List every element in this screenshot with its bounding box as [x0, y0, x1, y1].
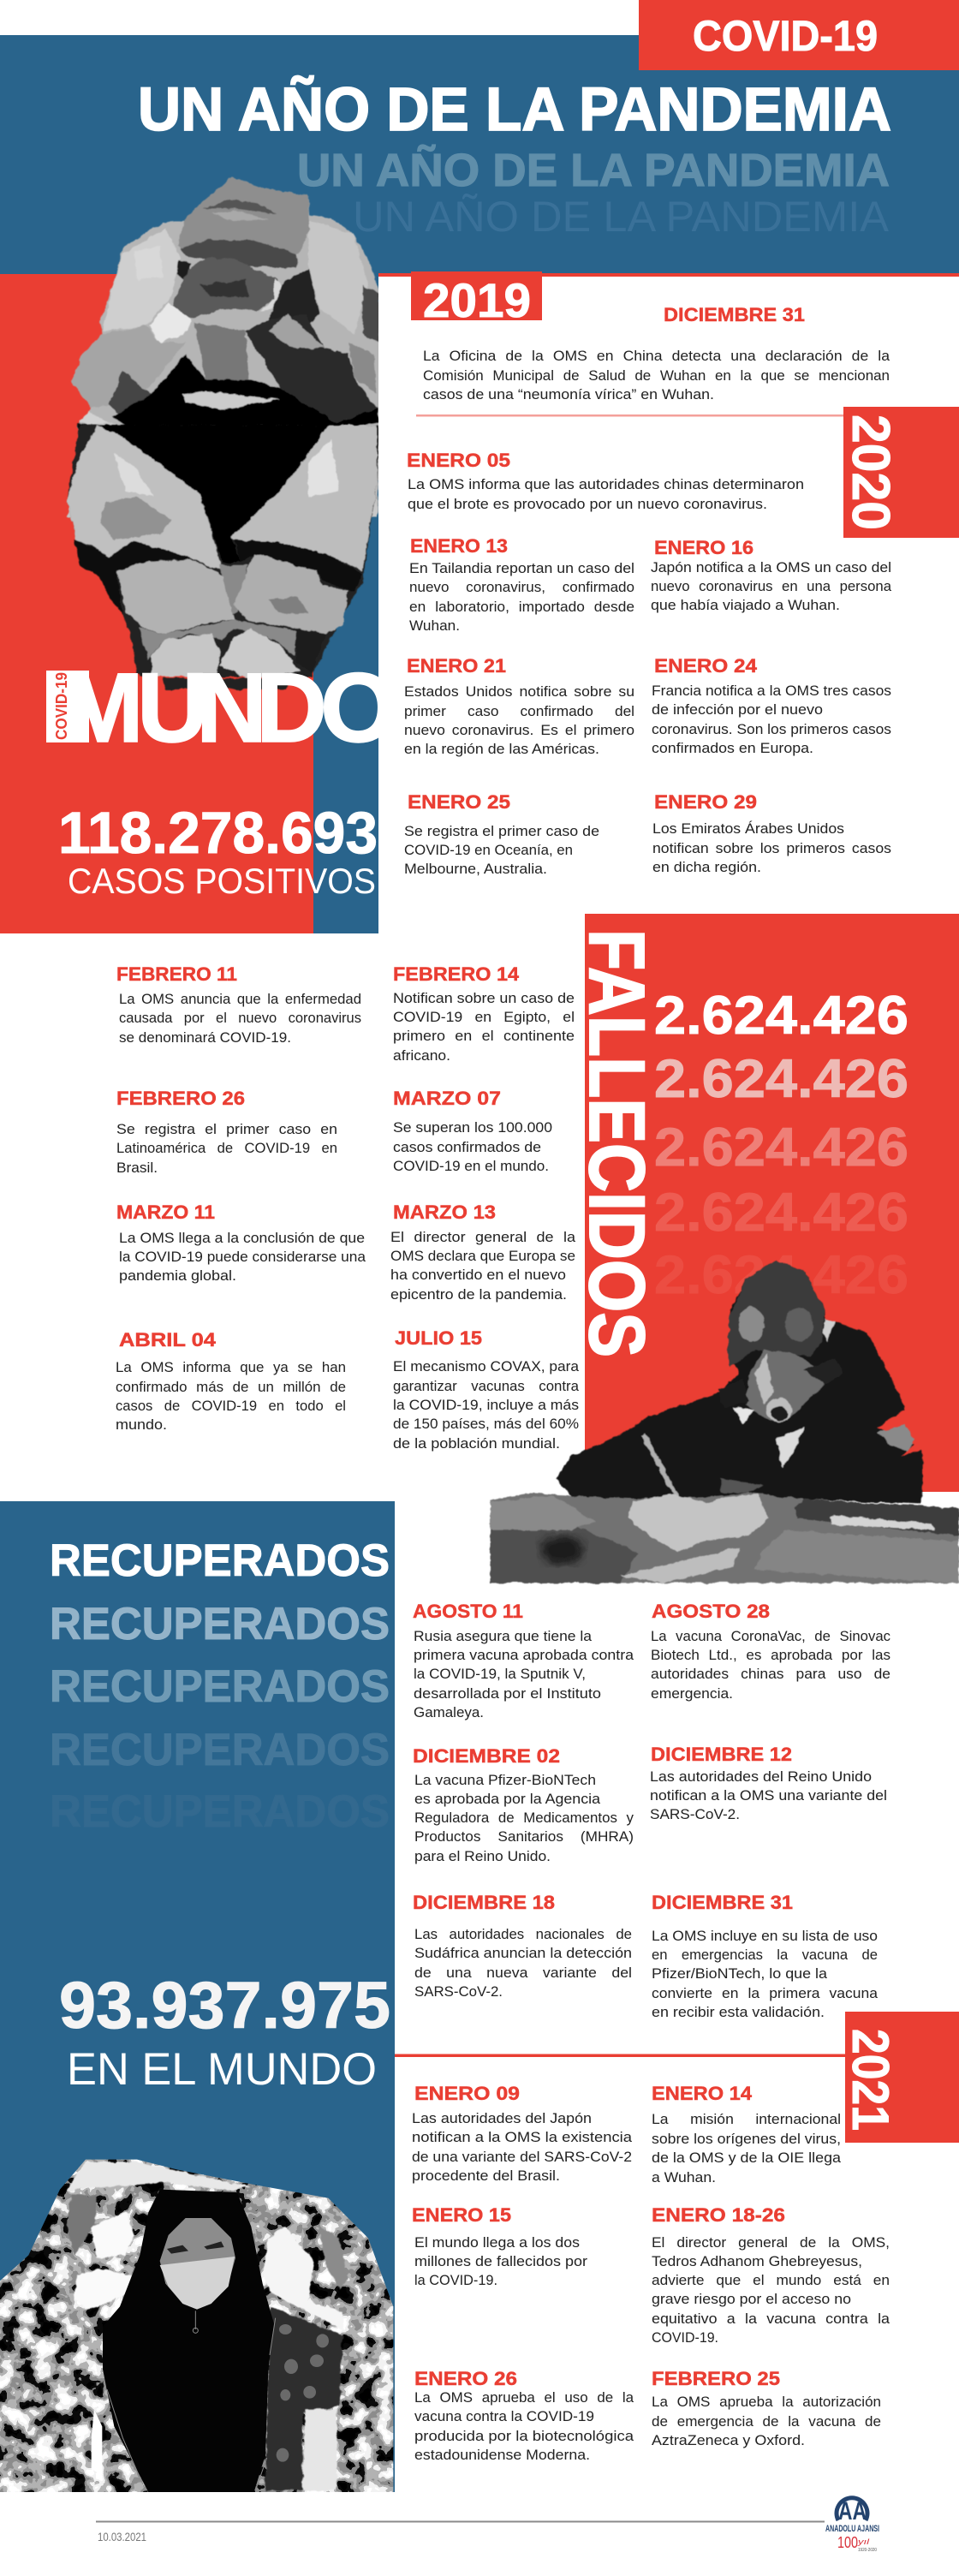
stat: deaths repeated [654, 986, 908, 1305]
event: DICIEMBRE 18: de una nueva variante del [414, 1965, 632, 1981]
event: ENERO 29: en dicha región. [652, 859, 761, 875]
event: ENERO 16: que había viajado a Wuhan. [651, 597, 840, 613]
event: ENERO 16 [651, 537, 892, 613]
event: ENERO 13: en laboratorio, importado desde [409, 599, 634, 615]
event: FEBRERO 25: de emergencia de la vacuna de [652, 2413, 881, 2430]
event: ENERO 25: Melbourne, Australia. [404, 861, 547, 877]
event: MARZO 13: MARZO 13 [393, 1202, 496, 1223]
logo: Anadolu Ajansi: yıl [857, 2537, 870, 2546]
event: AGOSTO 28: emergencia. [651, 1685, 733, 1702]
event: DICIEMBRE 02: es aprobada por la Agencia [414, 1791, 601, 1807]
event: MARZO 07 [393, 1088, 552, 1174]
event: ENERO 05: La OMS informa que las autoridades chinas determinaron [408, 476, 804, 492]
event: ENERO 24: coronavirus. Son los primeros casos [652, 721, 891, 737]
event: ENERO 26: La OMS aprueba el uso de la [414, 2389, 634, 2406]
heading: RECUPERADOS repeated: RECUPERADOS [50, 1786, 390, 1837]
event: DICIEMBRE 31 2019: Comisión Municipal de Salud de Wuhan en la que se mencionan [423, 367, 890, 384]
event: ENERO 13 [409, 535, 634, 634]
heading: FALLECIDOS vertical: FALLECIDOS [573, 929, 660, 1357]
header blue band [0, 35, 959, 274]
event: FEBRERO 26: Latinoamérica de COVID-19 en [116, 1140, 337, 1156]
event: DICIEMBRE 02 [413, 1745, 634, 1864]
stat: cases [58, 800, 378, 901]
stat: recovered: EN EL MUNDO [67, 2044, 377, 2095]
COVID-19 tag: COVID-19 [693, 12, 878, 60]
event: ENERO 15: millones de fallecidos por [414, 2253, 587, 2269]
event: MARZO 11: MARZO 11 [116, 1202, 215, 1223]
event: FEBRERO 11: La OMS anuncia que la enfermedad [119, 991, 361, 1007]
event: FEBRERO 25: La OMS aprueba la autorización [652, 2394, 881, 2410]
event: ENERO 18-26: grave riesgo por el acceso no [652, 2291, 851, 2307]
event: ENERO 09: ENERO 09 [414, 2083, 520, 2104]
event: ENERO 25: COVID-19 en Oceanía, en [404, 842, 573, 858]
event: ENERO 14: ENERO 14 [652, 2083, 753, 2104]
white panel edge [378, 277, 959, 914]
heading: RECUPERADOS repeated: RECUPERADOS [50, 1535, 390, 1586]
event: ENERO 09: Las autoridades del Japón [412, 2110, 592, 2126]
event: ABRIL 04: confirmado más de un millón de [116, 1379, 346, 1395]
event: ENERO 05: que el brote es provocado por un nuevo coronavirus. [408, 496, 767, 512]
event: ENERO 13: nuevo coronavirus, confirmado [409, 579, 634, 595]
event: DICIEMBRE 02: Reguladora de Medicamentos y [414, 1810, 634, 1826]
year tag 2021 [842, 2012, 959, 2143]
logo: Anadolu Ajansi [825, 2497, 879, 2553]
event: DICIEMBRE 31 2019: La Oficina de la OMS en China detecta una declaración de la [423, 348, 890, 364]
event: DICIEMBRE 18: Las autoridades nacionales de [414, 1926, 632, 1942]
stat: deaths repeated: 2.624.426 [654, 1049, 908, 1109]
event: ENERO 05: ENERO 05 [407, 450, 510, 471]
event: AGOSTO 28: autoridades chinas para uso de [651, 1666, 890, 1682]
stat: deaths repeated: 2.624.426 [654, 1183, 908, 1243]
event: ENERO 14: La misión internacional [652, 2111, 841, 2127]
event: ENERO 18-26: equitativo a la vacuna contra la [652, 2311, 890, 2327]
event: ENERO 18-26: El director general de la OMS, [652, 2234, 890, 2251]
event: ENERO 21 [404, 655, 634, 757]
event: ENERO 18-26: advierte que el mundo está en [652, 2272, 890, 2288]
event: FEBRERO 11: FEBRERO 11 [116, 963, 237, 985]
image: person in protective suit [67, 177, 381, 689]
event: MARZO 07: casos confirmados de [393, 1139, 541, 1155]
event: ENERO 24: de infección por el nuevo [652, 701, 823, 718]
heading: MUNDO: MUNDO [62, 653, 396, 763]
event: ENERO 14: sobre los orígenes del virus, [652, 2131, 841, 2147]
logo: Anadolu Ajansi: AA [838, 2497, 867, 2525]
event: JULIO 15: El mecanismo COVAX, para [393, 1358, 580, 1374]
event: ENERO 18-26: COVID-19. [652, 2329, 718, 2346]
panel: recuperados [0, 1501, 395, 2492]
event: MARZO 07: COVID-19 en el mundo. [393, 1158, 549, 1174]
event: DICIEMBRE 12: notifican a la OMS una variante del [650, 1787, 887, 1804]
event: MARZO 13: El director general de la [390, 1229, 576, 1245]
event: AGOSTO 11: AGOSTO 11 [413, 1601, 523, 1622]
event: FEBRERO 14: FEBRERO 14 [393, 963, 520, 985]
event: AGOSTO 28: AGOSTO 28 [652, 1601, 770, 1622]
event: ABRIL 04: mundo. [116, 1416, 167, 1433]
event: MARZO 13: ha convertido en el nuevo [390, 1267, 566, 1283]
stat: deaths repeated: 2.624.426 [654, 1245, 908, 1305]
event: AGOSTO 11 [413, 1601, 634, 1720]
image: student in gas mask [490, 1261, 959, 1583]
event: FEBRERO 26 [116, 1088, 337, 1176]
divider 2019 top [378, 273, 959, 277]
year tag 2020: 2020 [841, 414, 900, 530]
year tag 2021: 2021 [842, 2029, 899, 2131]
stat: recovered [59, 1969, 390, 2095]
divider to 2020 [416, 414, 844, 416]
logo: Anadolu Ajansi: ANADOLU AJANSI [825, 2524, 879, 2534]
event: ENERO 16: nuevo coronavirus en una persona [651, 578, 892, 594]
label: COVID-19 vertical: COVID-19 [53, 672, 70, 740]
event: DICIEMBRE 02: DICIEMBRE 02 [413, 1745, 560, 1767]
event: JULIO 15: de la población mundial. [393, 1435, 560, 1452]
event: ENERO 21: Estados Unidos notifica sobre su [404, 683, 634, 700]
event: ENERO 25 [404, 791, 599, 877]
event: ENERO 25: ENERO 25 [408, 791, 510, 813]
title: UN AÑO DE LA PANDEMIA [138, 76, 891, 144]
event: ENERO 24: confirmados en Europa. [652, 740, 813, 756]
event: ENERO 15: la COVID-19. [414, 2272, 497, 2288]
stat: recovered: 93.937.975 [59, 1969, 390, 2042]
event: DICIEMBRE 12 [650, 1744, 887, 1822]
stat: cases: 118.278.693 [58, 800, 378, 866]
event: ABRIL 04: La OMS informa que ya se han [116, 1359, 346, 1375]
event: FEBRERO 11 [116, 963, 361, 1046]
panel: mundo background [0, 274, 378, 933]
event: FEBRERO 11: se denominará COVID-19. [119, 1029, 291, 1046]
event: DICIEMBRE 02: Productos Sanitarios (MHRA) [414, 1828, 634, 1845]
event: ENERO 15 [412, 2204, 587, 2288]
event: ENERO 15: ENERO 15 [412, 2204, 511, 2226]
event: FEBRERO 14: africano. [393, 1047, 450, 1064]
event: ENERO 16: ENERO 16 [654, 537, 754, 558]
footer rule [96, 2521, 825, 2523]
event: ABRIL 04 [116, 1329, 346, 1433]
event: MARZO 07: MARZO 07 [393, 1088, 501, 1109]
event: DICIEMBRE 12: DICIEMBRE 12 [651, 1744, 792, 1765]
event: FEBRERO 25: FEBRERO 25 [652, 2368, 780, 2389]
logo: Anadolu Ajansi: 1920-2020 [858, 2548, 877, 2553]
heading: RECUPERADOS repeated: RECUPERADOS [50, 1725, 390, 1775]
event: ENERO 18-26 [652, 2204, 890, 2346]
event: ENERO 25: Se registra el primer caso de [404, 823, 599, 839]
event: ENERO 26: ENERO 26 [414, 2368, 517, 2389]
event: AGOSTO 28: Biotech Ltd., es aprobada por las [651, 1647, 890, 1663]
event: DICIEMBRE 31 2020: en recibir esta validación. [652, 2004, 825, 2020]
event: ENERO 05 [407, 450, 804, 512]
event: ENERO 16: Japón notifica a la OMS un caso del [651, 559, 891, 575]
title echo 2: UN AÑO DE LA PANDEMIA [353, 193, 890, 241]
event: DICIEMBRE 18: DICIEMBRE 18 [413, 1892, 555, 1913]
event: ENERO 14: de la OMS y de la OIE llega [652, 2150, 842, 2166]
event: ENERO 18-26: ENERO 18-26 [652, 2204, 785, 2226]
event: AGOSTO 11: desarrollada por el Instituto [414, 1685, 601, 1702]
stat: cases: CASOS POSITIVOS [68, 861, 376, 901]
event: ENERO 09: de una variante del SARS-CoV-2 [412, 2149, 632, 2165]
event: ENERO 26: estadounidense Moderna. [414, 2447, 590, 2463]
event: ABRIL 04: casos de COVID-19 en todo el [116, 1398, 346, 1414]
event: ENERO 26: vacuna contra la COVID-19 [414, 2408, 594, 2424]
COVID-19 tag [639, 0, 959, 70]
event: DICIEMBRE 31 2019: casos de una “neumonía vírica” en Wuhan. [423, 386, 714, 402]
event: FEBRERO 25 [652, 2368, 881, 2448]
event: AGOSTO 11: primera vacuna aprobada contra [414, 1647, 634, 1663]
event: ENERO 29 [652, 791, 891, 875]
event: DICIEMBRE 31 2020: La OMS incluye en su lista de uso [652, 1928, 878, 1944]
event: DICIEMBRE 31 2020: convierte en la primera vacuna [652, 1985, 879, 2001]
event: DICIEMBRE 31 2020: DICIEMBRE 31 [652, 1892, 793, 1913]
year tag 2019: 2019 [423, 273, 531, 327]
event: ENERO 21: en la región de las Américas. [404, 741, 599, 757]
event: AGOSTO 11: Gamaleya. [414, 1704, 484, 1720]
event: ABRIL 04: ABRIL 04 [119, 1329, 217, 1351]
event: MARZO 13: OMS declara que Europa se [390, 1248, 575, 1264]
event: ENERO 09: procedente del Brasil. [412, 2168, 560, 2184]
event: JULIO 15: JULIO 15 [395, 1327, 482, 1349]
event: DICIEMBRE 02: La vacuna Pfizer-BioNTech [414, 1772, 596, 1788]
event: MARZO 11 [116, 1202, 366, 1284]
event: FEBRERO 11: causada por el nuevo coronavirus [119, 1010, 361, 1026]
event: FEBRERO 26: Brasil. [116, 1160, 158, 1176]
event: DICIEMBRE 31 2020 [652, 1892, 879, 2020]
event: ENERO 09 [412, 2083, 633, 2184]
heading: RECUPERADOS repeated [50, 1535, 390, 1837]
event: ENERO 13: ENERO 13 [410, 535, 508, 557]
logo: Anadolu Ajansi: 100 [837, 2534, 858, 2551]
event: ENERO 26 [414, 2368, 634, 2463]
event: FEBRERO 14: Notifican sobre un caso de [393, 990, 575, 1006]
event: DICIEMBRE 31 2019: DICIEMBRE 31 [664, 304, 805, 325]
year tag 2020 [841, 407, 959, 538]
event: DICIEMBRE 02: para el Reino Unido. [414, 1848, 551, 1864]
divider 2021 [395, 2054, 846, 2057]
event: DICIEMBRE 18 [413, 1892, 632, 2000]
event: DICIEMBRE 31 2019 [423, 304, 890, 402]
event: DICIEMBRE 31 2020: Pfizer/BioNTech, lo que la [652, 1965, 828, 1982]
event: MARZO 11: la COVID-19 puede considerarse una [119, 1249, 366, 1265]
event: AGOSTO 28 [651, 1601, 890, 1702]
event: ENERO 21: nuevo coronavirus. Es el primero [404, 722, 634, 738]
event: DICIEMBRE 18: Sudáfrica anuncian la detección [414, 1945, 632, 1961]
event: DICIEMBRE 12: Las autoridades del Reino Unido [650, 1768, 872, 1785]
event: MARZO 07: Se superan los 100.000 [393, 1119, 552, 1136]
event: ENERO 13: Wuhan. [409, 617, 460, 634]
event: FEBRERO 14 [393, 963, 575, 1064]
event: MARZO 13 [390, 1202, 576, 1303]
event: FEBRERO 26: Se registra el primer caso en [116, 1121, 337, 1137]
event: ENERO 14: a Wuhan. [652, 2169, 716, 2185]
event: ENERO 29: ENERO 29 [654, 791, 757, 813]
event: AGOSTO 28: La vacuna CoronaVac, de Sinovac [651, 1628, 890, 1644]
heading: RECUPERADOS repeated: RECUPERADOS [50, 1599, 390, 1649]
event: ENERO 24 [652, 655, 891, 756]
event: ENERO 21: primer caso confirmado del [404, 703, 634, 719]
event: AGOSTO 11: la COVID-19, la Sputnik V, [414, 1666, 586, 1682]
event: ENERO 29: notifican sobre los primeros casos [652, 840, 891, 856]
event: ENERO 13: En Tailandia reportan un caso del [409, 560, 634, 576]
event: FEBRERO 25: AztraZeneca y Oxford. [652, 2432, 805, 2448]
event: FEBRERO 14: COVID-19 en Egipto, el [393, 1009, 575, 1025]
image: woman in camouflage cape with mask [0, 2160, 393, 2492]
event: MARZO 13: epicentro de la pandemia. [390, 1286, 567, 1303]
event: ENERO 29: Los Emiratos Árabes Unidos [652, 820, 844, 837]
event: AGOSTO 11: Rusia asegura que tiene la [414, 1628, 593, 1644]
date: 10.03.2021 [98, 2530, 146, 2543]
stat: deaths repeated: 2.624.426 [654, 1118, 908, 1178]
event: DICIEMBRE 12: SARS-CoV-2. [650, 1806, 740, 1822]
event: JULIO 15: la COVID-19, incluye a más [393, 1397, 579, 1413]
heading: RECUPERADOS repeated: RECUPERADOS [50, 1661, 390, 1712]
event: ENERO 09: notifican a la OMS la existencia [412, 2129, 633, 2145]
event: JULIO 15: garantizar vacunas contra [393, 1378, 580, 1394]
event: JULIO 15 [393, 1327, 580, 1452]
event: MARZO 11: pandemia global. [119, 1267, 236, 1284]
stat: deaths repeated: 2.624.426 [654, 986, 908, 1046]
event: JULIO 15: de 150 países, más del 60% [393, 1416, 579, 1432]
event: ENERO 18-26: Tedros Adhanom Ghebreyesus, [652, 2253, 862, 2269]
event: ENERO 24: ENERO 24 [654, 655, 758, 677]
event: FEBRERO 26: FEBRERO 26 [116, 1088, 245, 1109]
panel: fallecidos [573, 914, 959, 1492]
event: DICIEMBRE 18: SARS-CoV-2. [414, 1983, 503, 2000]
event: ENERO 21: ENERO 21 [407, 655, 506, 677]
event: ENERO 15: El mundo llega a los dos [414, 2234, 580, 2251]
event: ENERO 26: producida por la biotecnológica [414, 2428, 634, 2444]
event: ENERO 24: Francia notifica a la OMS tres casos [652, 683, 891, 699]
event: DICIEMBRE 31 2020: en emergencias la vacuna de [652, 1947, 878, 1963]
event: ENERO 14 [652, 2083, 842, 2185]
event: MARZO 11: La OMS llega a la conclusión de que [119, 1230, 365, 1246]
event: FEBRERO 14: primero en el continente [393, 1028, 575, 1044]
title echo 1: UN AÑO DE LA PANDEMIA [297, 145, 890, 196]
